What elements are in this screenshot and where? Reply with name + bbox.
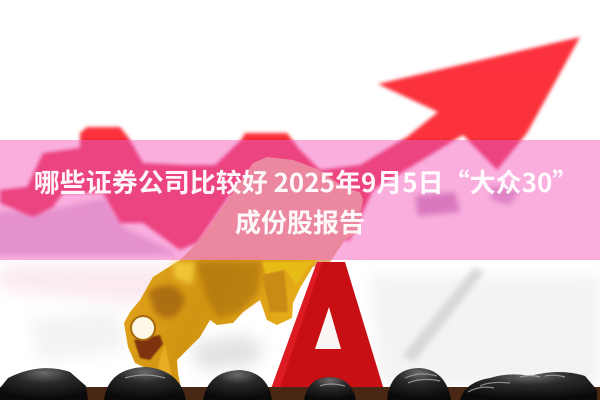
red rising arrow [0, 37, 580, 250]
golden bull [124, 157, 363, 400]
bead highlights [125, 374, 565, 392]
bull body and legs [124, 260, 317, 400]
abacus rail [0, 387, 600, 400]
pink title band [0, 140, 600, 260]
bull head and shoulders [180, 157, 363, 285]
title: 哪些证券公司比较好 2025年9月5日“大众30” [34, 163, 578, 200]
soft background shadows [0, 185, 600, 385]
title [34, 163, 578, 240]
bull tail ring [131, 316, 155, 340]
title: 成份股报告 [235, 203, 365, 240]
abacus beads [0, 367, 597, 400]
red letter A [267, 262, 387, 400]
bull shading [195, 262, 262, 318]
